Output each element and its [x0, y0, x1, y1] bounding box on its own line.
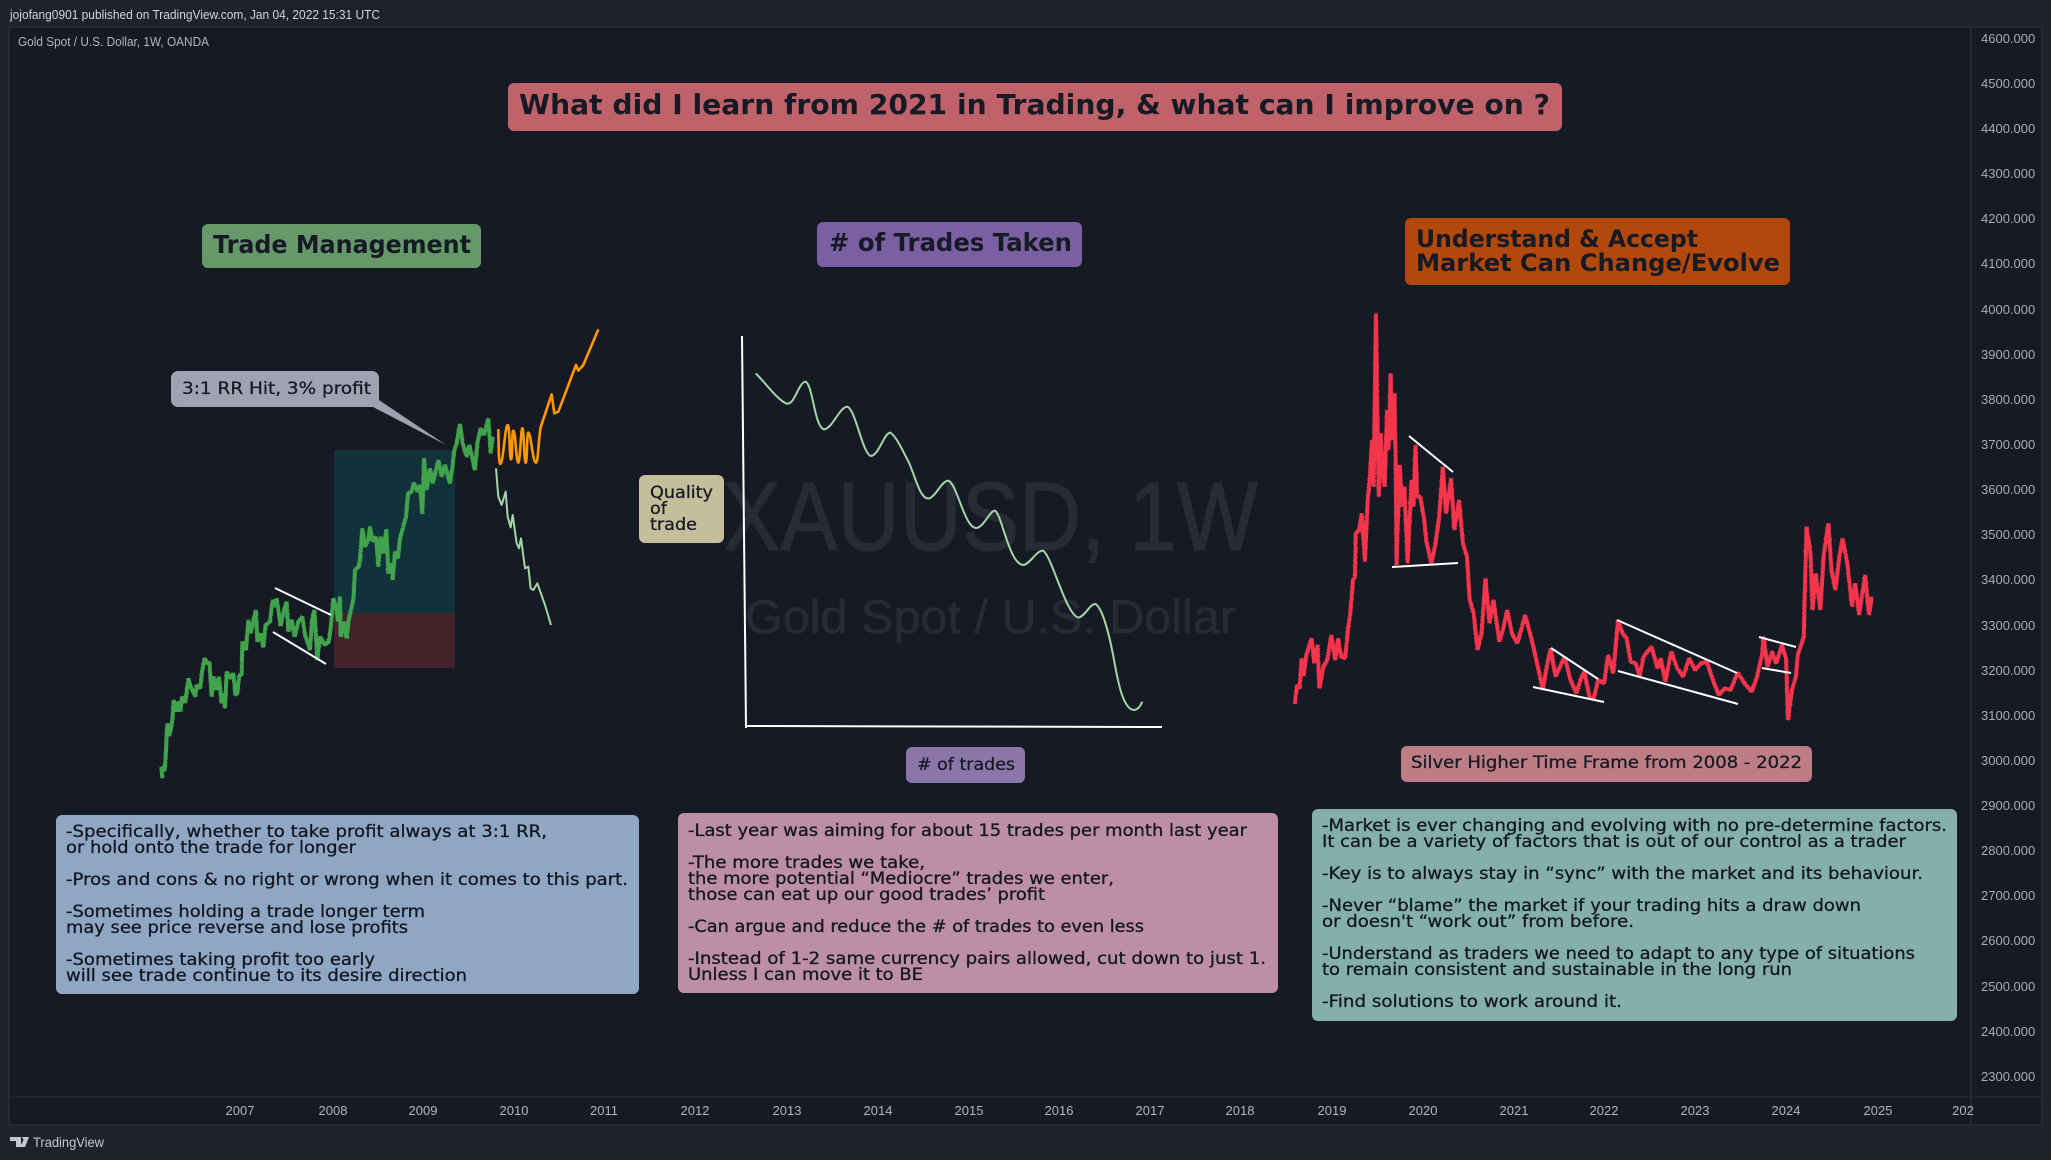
orange projection [498, 329, 598, 464]
price axis: 4200.000 [1981, 211, 2035, 226]
price axis: 2500.000 [1981, 979, 2035, 994]
time axis: 2025 [1864, 1103, 1892, 1118]
price axis: 3700.000 [1981, 437, 2035, 452]
time axis: 2012 [681, 1103, 709, 1118]
text panel: number of trades notes: -Last year was aiming for about 15 trades per month last year [688, 821, 1247, 840]
title [508, 83, 1562, 131]
price axis: 2800.000 [1981, 843, 2035, 858]
watermark [723, 462, 1258, 643]
heading: understand and accept [1405, 218, 1790, 285]
text panel: trade management notes: may see price reverse and lose profits [66, 918, 408, 937]
time axis: 202 [1952, 1103, 1974, 1118]
risk reward long position box [334, 450, 455, 668]
heading: trade management [202, 224, 481, 268]
panel: silver chart [1295, 313, 1872, 720]
declining quality curve [756, 373, 1142, 710]
price axis: 3500.000 [1981, 527, 2035, 542]
y axis label: quality of trade: Quality [650, 483, 713, 503]
time axis: 2017 [1136, 1103, 1164, 1118]
watermark: Gold Spot / U.S. Dollar [745, 590, 1236, 643]
price axis: 4400.000 [1981, 121, 2035, 136]
text panel: number of trades notes: -The more trades we take, [688, 853, 925, 872]
text panel: market evolution notes: -Key is to always stay in “sync” with the market and its behaviour. [1322, 864, 1923, 883]
text panel: number of trades notes: those can eat up our good trades’ profit [688, 885, 1046, 904]
price axis: 4600.000 [1981, 31, 2035, 46]
axes [742, 336, 1162, 728]
TradingView logo: TradingView [33, 1134, 105, 1150]
price axis: 2600.000 [1981, 933, 2035, 948]
panel: trade management chart [161, 329, 598, 778]
silver trendlines [1392, 436, 1796, 704]
price axis: 2400.000 [1981, 1024, 2035, 1039]
heading: understand and accept: Understand & Accept [1416, 225, 1698, 253]
silver price line [1295, 313, 1872, 720]
gold price line [161, 418, 493, 778]
heading: trade management: Trade Management [213, 230, 471, 259]
y axis label: quality of trade: trade [650, 515, 697, 535]
text panel: number of trades notes: Unless I can move it to BE [688, 965, 923, 984]
time axis: 2013 [773, 1103, 801, 1118]
time axis: 2011 [590, 1103, 618, 1118]
text panel: market evolution notes: to remain consistent and sustainable in the long run [1322, 960, 1792, 979]
text panel: market evolution notes [1312, 809, 1957, 1021]
time axis: 2023 [1681, 1103, 1709, 1118]
price axis [1981, 31, 2035, 1084]
text panel: number of trades notes [678, 813, 1278, 993]
publisher line: jojofang0901 published on TradingView.com, Jan 04, 2022 15:31 UTC [9, 7, 380, 22]
caption: silver timeframe [1401, 746, 1812, 782]
price axis: 2700.000 [1981, 888, 2035, 903]
price axis: 4100.000 [1981, 256, 2035, 271]
heading: understand and accept: Market Can Change/Evolve [1416, 249, 1780, 277]
symbol legend: Gold Spot / U.S. Dollar, 1W, OANDA [18, 34, 209, 49]
flag trendlines [273, 588, 331, 664]
x axis label: number of trades: # of trades [917, 755, 1015, 775]
price axis: 3400.000 [1981, 572, 2035, 587]
callout: 3 to 1 RR hit: 3:1 RR Hit, 3% profit [182, 379, 371, 399]
text panel: trade management notes: or hold onto the trade for longer [66, 838, 356, 857]
time axis: 2007 [226, 1103, 254, 1118]
x axis label: number of trades [906, 747, 1025, 783]
callout: 3 to 1 RR hit [171, 371, 446, 445]
price axis: 3100.000 [1981, 708, 2035, 723]
time axis: 2009 [409, 1103, 437, 1118]
price axis: 3800.000 [1981, 392, 2035, 407]
caption: silver timeframe: Silver Higher Time Frame from 2008 - 2022 [1411, 753, 1802, 773]
icon: TradingView mark [10, 1137, 29, 1147]
time axis: 2018 [1226, 1103, 1254, 1118]
time axis [226, 1103, 1974, 1118]
price axis: 3000.000 [1981, 753, 2035, 768]
time axis: 2016 [1045, 1103, 1073, 1118]
price axis: 4300.000 [1981, 166, 2035, 181]
time axis: 2024 [1772, 1103, 1800, 1118]
y axis label: quality of trade: of [650, 499, 668, 519]
price axis: 4000.000 [1981, 302, 2035, 317]
heading: number of trades taken: # of Trades Taken [829, 228, 1072, 257]
text panel: market evolution notes: -Never “blame” the market if your trading hits a draw down [1322, 896, 1861, 915]
time axis: 2010 [500, 1103, 528, 1118]
text panel: market evolution notes: or doesn't “work out” from before. [1322, 912, 1634, 931]
text panel: number of trades notes: -Can argue and reduce the # of trades to even less [688, 917, 1144, 936]
price axis: 3600.000 [1981, 482, 2035, 497]
text panel: number of trades notes: the more potential “Mediocre” trades we enter, [688, 869, 1114, 888]
watermark: XAUUSD, 1W [723, 462, 1258, 571]
price axis: 3900.000 [1981, 347, 2035, 362]
price axis: 2300.000 [1981, 1069, 2035, 1084]
text panel: trade management notes: -Pros and cons & no right or wrong when it comes to this part. [66, 870, 628, 889]
time axis: 2020 [1409, 1103, 1437, 1118]
heading: number of trades taken [817, 222, 1082, 267]
price axis: 3200.000 [1981, 663, 2035, 678]
text panel: trade management notes: -Sometimes taking profit too early [66, 950, 375, 969]
time axis: 2008 [319, 1103, 347, 1118]
text panel: number of trades notes: -Instead of 1-2 same currency pairs allowed, cut down to just 1. [688, 949, 1266, 968]
panel: number of trades chart [742, 336, 1162, 728]
price axis: 4500.000 [1981, 76, 2035, 91]
time axis: 2019 [1318, 1103, 1346, 1118]
text panel: market evolution notes: -Understand as traders we need to adapt to any type of situations [1322, 944, 1915, 963]
light green projection [496, 468, 551, 625]
text panel: trade management notes [56, 815, 639, 994]
price axis: 3300.000 [1981, 618, 2035, 633]
text panel: trade management notes: -Sometimes holding a trade longer term [66, 902, 425, 921]
text panel: market evolution notes: -Find solutions to work around it. [1322, 992, 1622, 1011]
time axis: 2015 [955, 1103, 983, 1118]
text panel: market evolution notes: -Market is ever changing and evolving with no pre-determine factors. [1322, 816, 1947, 835]
price axis: 2900.000 [1981, 798, 2035, 813]
time axis: 2021 [1500, 1103, 1528, 1118]
time axis: 2022 [1590, 1103, 1618, 1118]
time axis: 2014 [864, 1103, 892, 1118]
text panel: trade management notes: will see trade continue to its desire direction [66, 966, 467, 985]
text panel: market evolution notes: It can be a variety of factors that is out of our control as a trader [1322, 832, 1906, 851]
title: What did I learn from 2021 in Trading, & what can I improve on ? [519, 88, 1550, 121]
text panel: trade management notes: -Specifically, whether to take profit always at 3:1 RR, [66, 822, 547, 841]
y axis label: quality of trade [639, 475, 724, 543]
